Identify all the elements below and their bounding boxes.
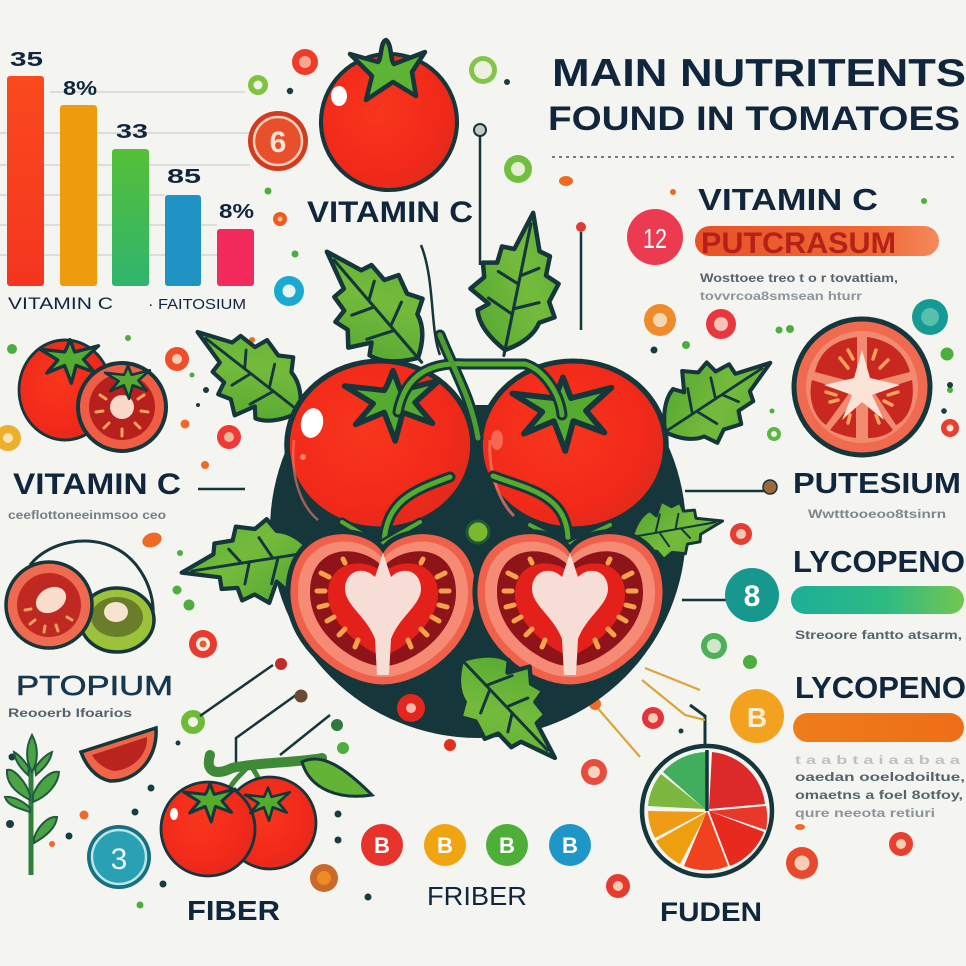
label: vitamin C centre: VITAMIN C	[307, 196, 473, 229]
small text: Reooerb Ifoarios	[8, 708, 132, 720]
bottom tomato vine with leaf	[161, 755, 372, 876]
small text: ceeflottoneeinmsoo ceo	[8, 510, 166, 522]
main tomato right	[480, 361, 666, 529]
title	[548, 52, 966, 138]
tomato half right	[475, 532, 665, 687]
red berry	[397, 694, 425, 722]
left halves with arc	[6, 541, 154, 652]
B badges row: B	[562, 833, 578, 858]
title: MAIN NUTRITENTS	[552, 52, 966, 95]
lycopeno section two	[793, 670, 966, 820]
right panel: vitamin C heading: VITAMIN C	[698, 182, 878, 217]
bar chart	[7, 49, 254, 313]
orange leader lines	[595, 668, 705, 757]
number badge B: B	[747, 702, 767, 733]
orange bar with label: PUTCRASUM	[701, 227, 896, 260]
label: fuden: FUDEN	[660, 897, 762, 927]
small text: Wwtttooeoo8tsinrn	[808, 509, 946, 521]
green bud	[467, 521, 489, 543]
bar chart: 33	[116, 121, 148, 143]
bar chart: 8%	[219, 201, 254, 223]
tomato half left	[288, 532, 478, 687]
lycopeno section two: qure neeota retiuri	[795, 808, 935, 820]
central dark disc	[270, 405, 685, 738]
lycopeno section two: t a a b t a i a a b a a	[795, 755, 961, 767]
calyx right	[512, 377, 611, 451]
right tomato slice	[794, 319, 930, 455]
bar chart: 35	[10, 49, 43, 71]
B badges row	[361, 824, 591, 866]
label: ptopium: PTOPIUM	[16, 670, 173, 701]
B badges row: B	[374, 833, 390, 858]
lycopeno section two: oaedan ooelodoiltue,	[795, 772, 965, 784]
right: putesium label: PUTESIUM	[793, 468, 961, 500]
pie chart	[642, 746, 772, 876]
lycopeno section two: LYCOPENO	[795, 670, 966, 705]
small text: tovvrcoa8smsean hturr	[700, 291, 863, 303]
lycopeno section one: LYCOPENO	[793, 544, 965, 579]
number badge 6: 6	[270, 126, 286, 159]
calyx left	[345, 371, 439, 441]
title: FOUND IN TOMATOES	[548, 100, 960, 138]
number badge 3	[87, 825, 151, 889]
bottom leaf	[429, 625, 587, 786]
lycopeno section one: Streoore fantto atsarm,	[795, 630, 962, 642]
left tomato pair	[19, 340, 166, 451]
lycopeno section two: omaetns a foel 8otfoy,	[795, 790, 963, 802]
label: friber: FRIBER	[427, 881, 527, 911]
top tomato with calyx	[321, 40, 457, 190]
herb sprig	[5, 735, 59, 875]
number badge 12	[627, 209, 683, 265]
number badge B	[730, 689, 784, 743]
number badge 8: 8	[744, 580, 760, 613]
bar chart: 85	[167, 166, 201, 188]
number badge 6	[248, 111, 308, 171]
grid lines behind bar chart	[0, 92, 250, 255]
bar chart: 8%	[63, 78, 97, 100]
small text: Wosttoee treo t o r tovattiam,	[700, 273, 898, 285]
label: vitamin C left: VITAMIN C	[13, 468, 181, 501]
label: fiber: FIBER	[187, 895, 280, 926]
B badges row: B	[499, 833, 515, 858]
bar chart: VITAMIN C	[8, 294, 113, 313]
number badge 12: 12	[643, 223, 667, 254]
small text	[700, 273, 898, 303]
number badge 3: 3	[111, 843, 127, 876]
bar chart: · FAITOSIUM	[148, 296, 246, 313]
lycopeno section one	[791, 544, 965, 642]
connector lines	[198, 130, 765, 770]
tomato wedge	[81, 728, 156, 781]
lower leaves	[175, 491, 727, 616]
vine stems	[342, 335, 610, 545]
B badges row: B	[437, 833, 453, 858]
main tomato left	[287, 361, 473, 529]
number badge 8	[725, 568, 779, 622]
leaves	[171, 204, 791, 466]
connector end dots	[275, 124, 777, 751]
